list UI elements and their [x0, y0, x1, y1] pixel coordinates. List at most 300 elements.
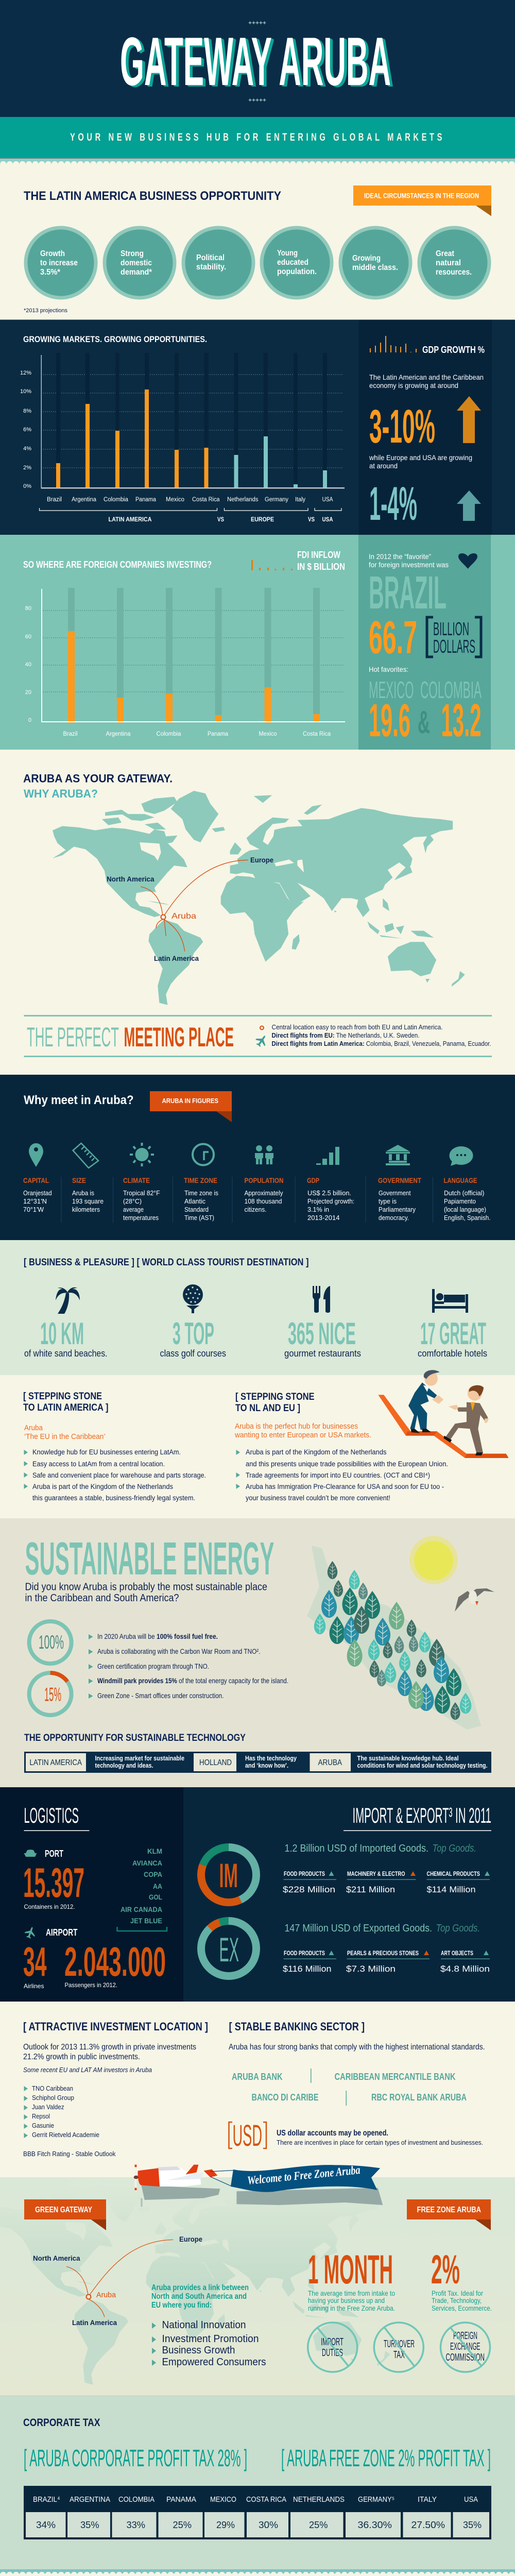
text: investment outlook: Outlook for 2013 11.3% growth in private investments	[23, 2043, 196, 2052]
circles: six reasons: Strong	[121, 249, 144, 258]
captions: tourism: class golf courses	[160, 1348, 226, 1359]
text: aruba provides a link: Aruba provides a link between	[151, 2283, 249, 2292]
icons: aruba figures	[29, 1143, 473, 1168]
icon: no foreign exchange commission	[441, 2323, 490, 2372]
list: what you find	[152, 2319, 266, 2368]
list: airlines: AVIANCA	[132, 1859, 162, 1867]
ribbon: aruba in figures: ARUBA IN FIGURES	[162, 1097, 218, 1105]
stat: airlines: Airlines	[24, 1982, 44, 1990]
text: us dollar accounts: There are incentives in place for certain types of investment and businesses.	[277, 2139, 483, 2146]
heading: stepping stone nl and eu	[235, 1392, 314, 1414]
table: corporate tax rates: COSTA RICA	[246, 2495, 286, 2504]
map labels	[107, 856, 273, 962]
list: banks: ARUBA BANK	[232, 2072, 282, 2082]
subheading: Did you know Aruba is probably the most sustainable place	[25, 1582, 267, 1593]
bar chart: GDP growth: Colombia	[104, 497, 129, 503]
text: flights: Central location easy to reach from both EU and Latin America.	[272, 1023, 443, 1031]
heading: imported goods: Top Goods.	[433, 1843, 476, 1854]
circles: six reasons: Growth	[40, 249, 65, 258]
bar chart: GDP growth: EUROPE	[251, 516, 274, 523]
bar chart: GDP growth: Brazil	[47, 497, 62, 503]
icon: no import duties: IMPORT	[321, 2336, 344, 2348]
text: favorite for foreign investment: for foreign investment was	[369, 561, 449, 569]
map labels: Latin America	[154, 954, 199, 962]
illustration: island of aruba with leaves	[307, 1546, 481, 1730]
bullet list: sustainability: Green Zone - Smart offices under construction.	[97, 1691, 224, 1700]
illustration: businessmen on stairs	[378, 1370, 509, 1458]
circles: six reasons: demand*	[121, 268, 152, 277]
bar chart: FDI: Colombia	[157, 731, 181, 737]
text: profit tax	[432, 2289, 492, 2312]
heading: fdi inflow	[297, 550, 345, 572]
icon: plane	[24, 1925, 37, 1940]
bar chart: GDP growth: Costa Rica	[192, 497, 220, 503]
text: hot favorites: Hot favorites:	[369, 665, 408, 673]
subheading: eu in the caribbean: Aruba	[24, 1423, 43, 1432]
circles: six reasons: population.	[277, 267, 317, 276]
text: figures values: citizens.	[244, 1206, 267, 1213]
circles: six reasons: natural	[436, 259, 461, 267]
stat: airlines	[23, 1939, 47, 1990]
bar chart: GDP growth: LATIN AMERICA	[108, 516, 152, 523]
text: us dollar accounts: US dollar accounts may be opened.	[277, 2129, 388, 2138]
text: figures values: Parliamentary	[379, 1206, 416, 1213]
bar chart: GDP growth: Panama	[135, 497, 157, 503]
panel: growing markets: 1-4%	[369, 478, 417, 530]
bar chart: GDP growth: 2%	[23, 465, 31, 471]
icon: bars	[316, 1147, 339, 1165]
labels: figures: GDP	[307, 1176, 319, 1184]
table: top exports: ART OBJECTS	[441, 1950, 473, 1957]
table: top exports: $4.8 Million	[440, 1964, 490, 1974]
circles: six reasons: Growing	[352, 254, 381, 263]
footnote: projections: *2013 projections	[24, 308, 67, 314]
text: figures values: Government	[379, 1189, 411, 1197]
text: profit tax: Profit Tax. Ideal for	[432, 2289, 483, 2297]
bar chart: FDI: Mexico	[259, 731, 277, 737]
label: port: PORT	[45, 1849, 63, 1859]
list: banks	[232, 2069, 467, 2106]
table: top exports: PEARLS & PRECIOUS STONES	[347, 1950, 419, 1957]
bar chart: FDI: 0	[28, 717, 31, 723]
table: corporate tax rates: BRAZIL⁴	[33, 2495, 60, 2504]
bar: sustainable technology	[24, 1752, 491, 1773]
list: investors: Gerrit Rietveld Academie	[32, 2131, 99, 2139]
bar: sustainable technology: LATIN AMERICA	[29, 1758, 82, 1767]
heading: fdi inflow: FDI INFLOW	[297, 550, 340, 560]
bar chart: FDI: 60	[25, 634, 31, 640]
ribbon: aruba in figures	[150, 1091, 232, 1122]
table: corporate tax rates: 35%	[463, 2520, 482, 2530]
table: corporate tax rates	[24, 2486, 491, 2539]
bar chart: FDI	[25, 588, 345, 737]
text: investment outlook	[23, 2043, 196, 2061]
icon: no turnover tax	[374, 2323, 423, 2372]
bullet list: sustainability: Windmill park provides 15% of the total energy capacity for the island.	[97, 1676, 288, 1685]
map labels: Aruba	[96, 2291, 116, 2299]
heading: [ BUSINESS & PLEASURE ] [ WORLD CLASS TOURIST DESTINATION ]	[24, 1257, 309, 1268]
text: banks intro: Aruba has four strong banks that comply with the highest international standards.	[229, 2043, 485, 2052]
table: corporate tax rates: 33%	[127, 2520, 145, 2530]
list: investors: Repsol	[32, 2112, 50, 2120]
bar chart: GDP growth: Italy	[295, 497, 305, 503]
text: figures values: Papiamento	[444, 1197, 476, 1205]
text: figures values: 3.1% in	[307, 1206, 329, 1213]
captions: tourism: comfortable hotels	[418, 1348, 487, 1359]
decoration: bottom row of marks: +++++	[248, 97, 266, 104]
ribbon: ideal circumstances	[353, 185, 491, 216]
heading: exported goods: 147 Million USD of Exported Goods.	[284, 1923, 432, 1934]
panel: free zone: 1 MONTH	[308, 2246, 393, 2292]
heading: fdi inflow: IN $ BILLION	[297, 562, 345, 572]
heading: ARUBA AS YOUR GATEWAY.	[23, 772, 173, 785]
text: favorite for foreign investment	[369, 552, 449, 569]
text: flights	[272, 1023, 491, 1047]
bar: sustainable technology: Increasing market for sustainable	[95, 1754, 184, 1762]
panel: aruba as your gateway	[0, 750, 515, 1075]
bar chart: FDI: 20	[25, 689, 31, 696]
text: figures values: kilometers	[72, 1206, 100, 1213]
panel: logistics: LOGISTICS	[24, 1803, 79, 1827]
stat: mexico and colombia: &	[418, 705, 430, 740]
text: average time: running in the Free Zone Aruba.	[308, 2304, 395, 2312]
stats: tourism	[40, 1316, 486, 1351]
panel: logistics: 15.397	[23, 1860, 84, 1906]
text: europe usa growth: at around	[369, 462, 398, 470]
table: top imports	[283, 1870, 490, 1894]
text: figures values: 2013-2014	[307, 1214, 340, 1222]
text: us dollar accounts	[277, 2129, 483, 2146]
arrow: orange up	[457, 396, 481, 443]
table: corporate tax rates: 29%	[216, 2520, 235, 2530]
circles: six reasons: to increase	[40, 259, 78, 267]
table: corporate tax rates: 35%	[80, 2520, 99, 2530]
text: profit tax: Services, Ecommerce.	[432, 2304, 492, 2312]
icon: speech bubble	[449, 1146, 473, 1166]
label: billion dollars: BILLION	[433, 618, 469, 639]
panel: investment and banking	[0, 2002, 515, 2177]
table: top imports: CHEMICAL PRODUCTS	[426, 1870, 480, 1877]
icon: ship	[24, 1850, 37, 1857]
stat: containers	[23, 1860, 84, 1910]
heading: stepping stone latin america: [ STEPPING STONE	[23, 1391, 102, 1402]
table: corporate tax rates: 25%	[309, 2520, 328, 2530]
bar chart: FDI: Costa Rica	[303, 731, 331, 737]
icon: seagull	[455, 1588, 494, 1612]
circles: six reasons: domestic	[121, 259, 152, 267]
labels: figures: TIME ZONE	[184, 1176, 217, 1184]
heading: stepping stone latin america	[23, 1391, 108, 1413]
text: aruba provides a link: EU where you find:	[151, 2301, 212, 2310]
bullet list: nl and eu: Aruba is part of the Kingdom of the Netherlands	[246, 1448, 387, 1456]
text: figures values: average	[123, 1206, 144, 1213]
chart: 15% ring: 15%	[44, 1684, 61, 1705]
list: investors: TNO Caribbean	[32, 2084, 73, 2092]
table: top exports	[283, 1950, 490, 1974]
text: figures values: (local language)	[444, 1206, 486, 1213]
bullet list: sustainability: Green certification program through TNO.	[97, 1662, 209, 1670]
panel: foreign investment	[0, 535, 515, 750]
text: fitch rating: BBB Fitch Rating - Stable Outlook	[23, 2150, 116, 2158]
map labels: Europe	[250, 856, 273, 864]
bar: sustainable technology: The sustainable knowledge hub. Ideal	[357, 1754, 458, 1762]
bar chart: GDP growth: 8%	[23, 408, 31, 414]
text: figures values: US$ 2.5 billion.	[307, 1189, 351, 1197]
icon: sun	[409, 1536, 458, 1584]
heading: attractive investment location: [ ATTRACTIVE INVESTMENT LOCATION ]	[23, 2020, 208, 2033]
bullet list: latin america	[24, 1448, 206, 1502]
illustration: plane with banner	[134, 2163, 383, 2207]
heading: gdp growth: GDP GROWTH %	[422, 345, 485, 355]
table: corporate tax rates: 34%	[36, 2520, 56, 2530]
panel: stepping stones	[0, 1370, 515, 1518]
bullet list: sustainability: Aruba is collaborating with the Carbon War Room and TNO².	[97, 1647, 261, 1655]
text: figures values: Time (AST)	[184, 1214, 214, 1222]
chart: 100% ring: 100%	[39, 1632, 64, 1653]
text: europe usa growth	[369, 453, 472, 470]
icon: small orange spark bars	[251, 560, 293, 570]
text: figures values: 193 square	[72, 1197, 104, 1205]
bullet list: latin america: Knowledge hub for EU businesses entering LatAm.	[32, 1448, 181, 1456]
text: figures values: Dutch (official)	[444, 1189, 484, 1197]
panel: logistics	[0, 1787, 183, 2002]
icon: ruler	[73, 1143, 98, 1168]
icon: usd bracket: USD	[233, 2119, 262, 2153]
icon: no import duties	[308, 2323, 357, 2372]
panel: footer	[0, 2569, 515, 2576]
text: aruba provides a link	[151, 2283, 249, 2310]
text: figures values: temperatures	[123, 1214, 159, 1222]
text: figures values: 12°31'N	[23, 1197, 47, 1205]
icon: bank	[386, 1145, 410, 1165]
icon: no turnover tax: TAX	[393, 2349, 405, 2361]
bullet list: sustainability: In 2020 Aruba will be 100% fossil fuel free.	[97, 1632, 218, 1640]
decoration: top row of marks: +++++	[248, 20, 266, 26]
bar: sustainable technology: technology and ideas.	[95, 1761, 153, 1769]
chart: 15% ring	[29, 1673, 72, 1715]
list: investors: Gasunie	[32, 2122, 54, 2129]
stat: passengers: 2.043.000	[64, 1939, 166, 1985]
heading: CORPORATE TAX	[23, 2417, 100, 2429]
circles: six reasons: Political	[196, 253, 225, 262]
icon: no turnover tax: TURNOVER	[384, 2338, 415, 2350]
panel: free zone: 2%	[431, 2246, 460, 2292]
text: figures values: English, Spanish.	[444, 1214, 490, 1222]
icon: bed	[432, 1289, 468, 1313]
bar chart: FDI: 80	[25, 605, 31, 612]
subheading: perfect hub: wanting to enter European or USA markets.	[234, 1431, 371, 1439]
stat: mexico and colombia: MEXICO	[369, 676, 414, 703]
table: corporate tax rates: COLOMBIA	[118, 2495, 154, 2504]
bar chart: GDP growth: Netherlands	[227, 497, 259, 503]
text: figures values: (28°C)	[123, 1197, 142, 1205]
bar chart: GDP growth: USA	[322, 497, 333, 503]
heading: imported goods: 1.2 Billion USD of Imported Goods.	[284, 1843, 428, 1854]
text: figures values: type is	[379, 1197, 397, 1205]
table: corporate tax rates: NETHERLANDS	[293, 2495, 345, 2504]
list: airlines: KLM	[147, 1847, 162, 1855]
circles: six reasons: Great	[436, 249, 454, 258]
ribbon: free zone aruba	[407, 2199, 491, 2230]
labels: figures: CLIMATE	[123, 1176, 150, 1184]
heading: stable banking sector: [ STABLE BANKING SECTOR ]	[229, 2020, 365, 2033]
bar chart: GDP growth: Argentina	[72, 497, 97, 503]
bar chart: GDP growth: Mexico	[166, 497, 184, 503]
text: latin american growth	[369, 373, 484, 389]
heading: opportunity for sustainable technology: THE OPPORTUNITY FOR SUSTAINABLE TECHNOLOGY	[24, 1733, 246, 1743]
labels: figures	[23, 1176, 477, 1184]
table: corporate tax rates: 36.30%	[357, 2520, 392, 2530]
bullet list: nl and eu	[236, 1448, 448, 1502]
bar chart: GDP growth: VS	[308, 516, 315, 523]
circles: six reasons: stability.	[196, 263, 226, 272]
panel: corporate tax	[0, 2395, 515, 2570]
bar: sustainable technology: HOLLAND	[199, 1758, 232, 1767]
labels: figures: CAPITAL	[23, 1176, 49, 1184]
text: latin american growth: The Latin American and the Caribbean	[369, 373, 484, 381]
marker: aruba	[87, 2295, 91, 2299]
icon: sun	[130, 1143, 154, 1166]
labels: figures: SIZE	[72, 1176, 86, 1184]
text: favorite for foreign investment: In 2012 the “favorite”	[369, 552, 431, 561]
bar chart: GDP growth: USA	[322, 516, 333, 523]
table: corporate tax rates: PANAMA	[166, 2495, 196, 2504]
heading: stepping stone latin america: TO LATIN AMERICA ]	[23, 1402, 108, 1413]
text: average time	[308, 2289, 395, 2312]
map labels: North America	[33, 2254, 80, 2262]
ribbon: free zone aruba: FREE ZONE ARUBA	[417, 2206, 481, 2214]
list: airlines: AA	[153, 1882, 162, 1890]
circles: six reasons: 3.5%*	[40, 268, 61, 277]
text: figures values: Time zone is	[184, 1189, 218, 1197]
table: top imports: MACHINERY & ELECTRO	[347, 1870, 405, 1877]
subheading: in the Caribbean and South America?	[25, 1592, 179, 1604]
heading: GROWING MARKETS. GROWING OPPORTUNITIES.	[23, 334, 207, 344]
text: figures values: Tropical 82°F	[123, 1189, 160, 1197]
stats: tourism: 365 NICE	[288, 1316, 356, 1351]
bullet list: latin america: Safe and convenient place for warehouse and parts storage.	[32, 1471, 206, 1479]
stats: tourism: 10 KM	[40, 1316, 84, 1351]
heading: THE LATIN AMERICA BUSINESS OPPORTUNITY	[24, 189, 281, 203]
text: figures values	[23, 1189, 490, 1222]
bar chart: FDI: Panama	[208, 731, 229, 737]
icon: people	[255, 1145, 273, 1164]
subheading	[25, 1582, 267, 1604]
panel: growing markets: 3-10%	[369, 400, 435, 453]
list: what you find: National Innovation	[162, 2319, 246, 2331]
text: profit tax: Trade, Technology,	[432, 2296, 482, 2304]
world map: faded	[0, 2219, 390, 2384]
subheading: eu in the caribbean: ‘The EU in the Caribbean’	[24, 1432, 105, 1441]
chart: export donut	[201, 1921, 256, 1976]
icon: no foreign exchange commission: COMMISSION	[446, 2352, 485, 2363]
heading: SO WHERE ARE FOREIGN COMPANIES INVESTING?	[23, 560, 212, 570]
title	[120, 24, 393, 101]
list: what you find: Business Growth	[162, 2345, 235, 2356]
label: airport: AIRPORT	[46, 1927, 78, 1938]
list: what you find: Investment Promotion	[162, 2333, 259, 2345]
table: corporate tax rates: ITALY	[418, 2495, 437, 2504]
list: airlines	[121, 1847, 162, 1925]
bar: sustainable technology: and ‘know how’.	[245, 1761, 288, 1769]
text: flights: Direct flights from Latin America: Colombia, Brazil, Venezuela, Panama, Ecuador.	[272, 1040, 491, 1047]
text: recent investors: Some recent EU and LAT AM investors in Aruba	[23, 2066, 152, 2074]
table: corporate tax rates: 27.50%	[411, 2520, 445, 2530]
bar chart: GDP growth: 0%	[23, 483, 31, 489]
banner text: Welcome to Free Zone Aruba	[247, 2163, 360, 2187]
stat: containers: Containers in 2012.	[24, 1903, 75, 1910]
routes from aruba	[141, 860, 248, 952]
heading: stepping stone nl and eu: [ STEPPING STONE	[235, 1392, 314, 1402]
chart: import donut	[201, 1848, 256, 1902]
list: what you find: Empowered Consumers	[162, 2357, 266, 2368]
icon: palm tree	[56, 1287, 80, 1314]
ribbon: ideal circumstances: IDEAL CIRCUMSTANCES IN THE REGION	[364, 192, 479, 200]
icon: no foreign exchange commission: FOREIGN	[453, 2330, 477, 2342]
table: top exports: $116 Million	[283, 1964, 332, 1974]
bar chart: GDP growth: 6%	[23, 427, 31, 433]
list: airlines: COPA	[144, 1870, 162, 1878]
panel: aruba as your gateway: MEETING PLACE	[124, 1022, 234, 1053]
table: top imports: $114 Million	[426, 1885, 476, 1894]
captions: tourism: of white sand beaches.	[24, 1348, 107, 1359]
bar chart: GDP growth: VS	[217, 516, 224, 523]
table: top imports: FOOD PRODUCTS	[284, 1870, 325, 1877]
list: investors: Schiphol Group	[32, 2094, 74, 2102]
text: figures values: Oranjestad	[23, 1189, 52, 1197]
icon: clock	[193, 1144, 214, 1165]
table: top exports: $7.3 Million	[346, 1964, 396, 1974]
bar chart: GDP growth	[20, 353, 345, 523]
chart: 100% ring	[29, 1621, 72, 1664]
subheading: eu in the caribbean	[24, 1423, 105, 1441]
panel: import and export	[183, 1787, 515, 2002]
list: airlines: GOL	[149, 1893, 162, 1901]
labels: figures: GOVERNMENT	[378, 1176, 421, 1184]
table: top exports: FOOD PRODUCTS	[284, 1950, 325, 1957]
text: figures values: Atlantic	[184, 1197, 205, 1205]
panel: why meet in aruba	[0, 1075, 515, 1240]
list: investors	[24, 2084, 99, 2139]
bar chart: FDI: 40	[25, 662, 31, 668]
table: corporate tax rates: GERMANY⁵	[358, 2495, 394, 2504]
icon: usd bracket	[229, 2119, 266, 2153]
text: latin american growth: economy is growing at around	[369, 381, 458, 389]
map labels: North America	[107, 875, 154, 883]
table: corporate tax rates: USA	[464, 2495, 478, 2504]
text: average time: having your business up and	[308, 2296, 385, 2304]
panel: corporate tax: [ ARUBA CORPORATE PROFIT TAX 28% ]	[24, 2445, 247, 2471]
text: figures values: 70°1'W	[23, 1206, 44, 1213]
bullet list: latin america: this guarantees a stable, business-friendly legal system.	[32, 1494, 195, 1502]
list: investors: Juan Valdez	[32, 2103, 64, 2111]
labels: figures: POPULATION	[244, 1176, 283, 1184]
list: banks: CARIBBEAN MERCANTILE BANK	[335, 2072, 455, 2082]
heading: stepping stone nl and eu: TO NL AND EU ]	[235, 1403, 300, 1414]
bullet list: latin america: Easy access to LatAm from a central location.	[32, 1460, 165, 1468]
icon: golf ball	[183, 1284, 203, 1313]
circles: six reasons: Young	[277, 249, 298, 258]
icon: cutlery	[313, 1286, 330, 1313]
marker: aruba	[161, 915, 166, 919]
text: figures values: democracy.	[379, 1214, 409, 1222]
captions: tourism: gourmet restaurants	[284, 1348, 361, 1359]
bar: sustainable technology: ARUBA	[318, 1758, 342, 1767]
text: aruba provides a link: North and South America and	[151, 2292, 247, 2301]
table: corporate tax rates: 25%	[173, 2520, 192, 2530]
bar chart: GDP growth: 10%	[20, 388, 31, 395]
table: corporate tax rates: ARGENTINA	[70, 2495, 110, 2504]
